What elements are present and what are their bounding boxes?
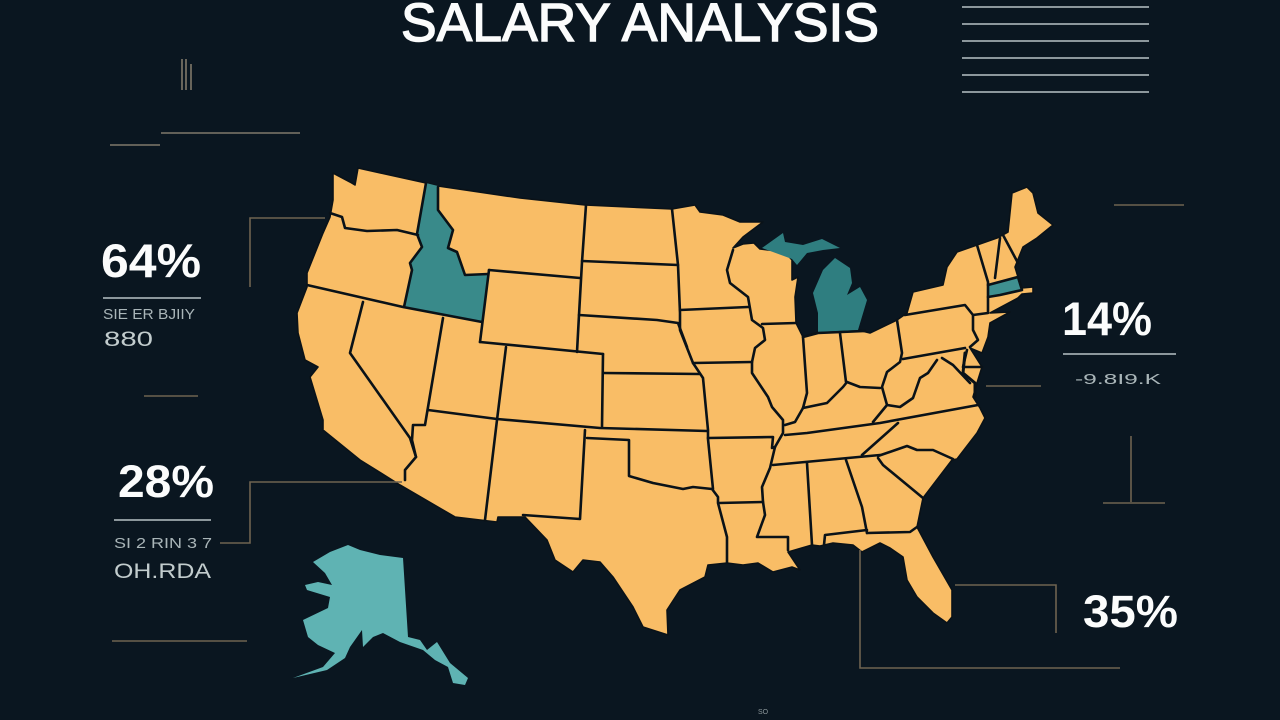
highlighted state: Michigan lower peninsula: [813, 258, 867, 332]
value: 28%: [118, 456, 214, 507]
highlighted state: Michigan upper peninsula: [762, 233, 840, 265]
state borders: [307, 183, 1022, 563]
callout: 28%: [114, 456, 214, 583]
connector: 14%: [986, 385, 1041, 387]
divider above 28%: [144, 395, 198, 397]
label: SIE ER BJIIY: [103, 306, 195, 323]
land silhouette: [297, 168, 1053, 635]
decorative lines: top left: [110, 59, 300, 145]
underline: [103, 297, 201, 299]
footer text: SO: [758, 709, 769, 716]
callout: 64%: [101, 234, 201, 351]
sub-label: 880: [104, 328, 153, 351]
sub-label: OH.RDA: [114, 560, 211, 583]
callout: 35%: 35%: [1083, 586, 1178, 637]
label: -9.8I9.K: [1075, 371, 1161, 388]
connector: 28%: [220, 482, 402, 543]
map: contiguous United States: [297, 168, 1053, 635]
highlighted state: Idaho: [404, 183, 488, 322]
value: 14%: [1062, 292, 1152, 345]
underline: [114, 519, 211, 521]
highlighted state: Massachusetts: [988, 277, 1022, 297]
underline: [1063, 353, 1176, 355]
decorative lines: top right: [962, 7, 1149, 92]
top-right rule: [1114, 204, 1184, 206]
connector: 64%: [250, 218, 325, 287]
map: Alaska: [293, 545, 468, 685]
label: SI 2 RIN 3 7: [114, 535, 212, 552]
callout: 14%: [1062, 292, 1176, 388]
bottom-left rule: [112, 640, 247, 642]
right bracket: [1103, 436, 1165, 503]
value: 64%: [101, 234, 201, 287]
connector: 35% lower: [860, 550, 1120, 668]
connector: 35% upper: [955, 585, 1056, 633]
